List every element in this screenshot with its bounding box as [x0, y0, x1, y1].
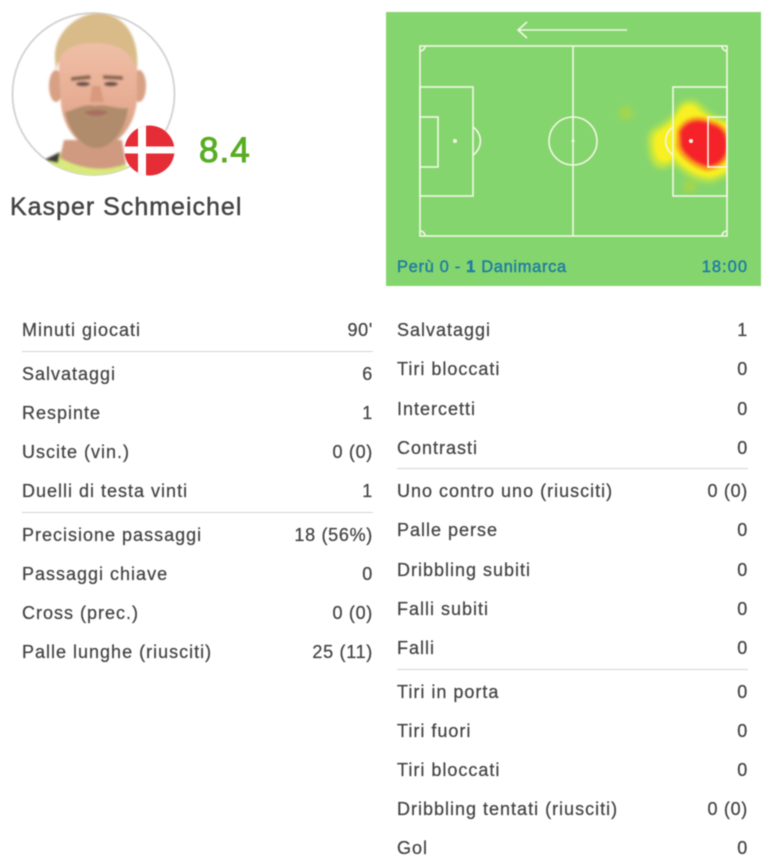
panel: defending and attacking stats: 0: [737, 682, 748, 702]
panel: defending and attacking stats: Intercetti: [397, 399, 476, 419]
flag of Denmark: [124, 124, 175, 176]
panel: goalkeeping and passing stats: Salvataggi: [22, 364, 116, 384]
rating: 8.4: [199, 131, 251, 170]
panel: goalkeeping and passing stats: 1: [362, 481, 373, 501]
panel: goalkeeping and passing stats: 90': [347, 320, 373, 340]
panel: defending and attacking stats: 1: [737, 320, 748, 340]
panel: defending and attacking stats: Falli: [397, 638, 435, 658]
panel: defending and attacking stats: Falli subiti: [397, 599, 489, 619]
panel: defending and attacking stats: Dribbling subiti: [397, 560, 531, 580]
player name: Kasper Schmeichel: [10, 193, 242, 221]
panel: defending and attacking stats: 0: [737, 520, 748, 540]
panel: defending and attacking stats: 0 (0): [707, 481, 748, 501]
panel: defending and attacking stats: 0: [737, 721, 748, 741]
panel: goalkeeping and passing stats: 1: [362, 403, 373, 423]
panel: goalkeeping and passing stats: 0 (0): [332, 442, 373, 462]
panel: goalkeeping and passing stats: 25 (11): [312, 642, 373, 662]
panel: defending and attacking stats: 0: [737, 760, 748, 780]
panel: defending and attacking stats: 0: [737, 638, 748, 658]
panel: defending and attacking stats: 0 (0): [707, 799, 748, 819]
panel: defending and attacking stats: Tiri fuori: [397, 721, 471, 741]
panel: goalkeeping and passing stats: 0 (0): [332, 603, 373, 623]
panel: defending and attacking stats: Tiri in porta: [397, 682, 499, 702]
player photo: [11, 12, 176, 176]
panel: defending and attacking stats: 0: [737, 359, 748, 379]
panel: goalkeeping and passing stats: Palle lunghe (riusciti): [22, 642, 212, 662]
panel: goalkeeping and passing stats: Respinte: [22, 403, 101, 423]
panel: defending and attacking stats: Gol: [397, 838, 428, 858]
panel: defending and attacking stats: 0: [737, 599, 748, 619]
panel: goalkeeping and passing stats: Minuti giocati: [22, 320, 141, 340]
panel: goalkeeping and passing stats: [22, 320, 373, 663]
match score: Perù 0 - 1 Danimarca: [397, 258, 567, 276]
panel: defending and attacking stats: Salvataggi: [397, 320, 491, 340]
panel: defending and attacking stats: [396, 320, 748, 858]
panel: goalkeeping and passing stats: Uscite (vin.): [22, 442, 130, 462]
panel: goalkeeping and passing stats: Cross (prec.): [22, 603, 139, 623]
arrow: attack direction: [518, 22, 627, 38]
panel: defending and attacking stats: Tiri bloccati: [397, 359, 500, 379]
panel: goalkeeping and passing stats: 6: [362, 364, 373, 384]
panel: defending and attacking stats: Uno contro uno (riusciti): [397, 481, 613, 501]
match time: 18:00: [702, 258, 748, 276]
panel: defending and attacking stats: 0: [737, 560, 748, 580]
heatmap panel: [386, 12, 761, 286]
panel: defending and attacking stats: Contrasti: [397, 438, 478, 458]
panel: goalkeeping and passing stats: Duelli di testa vinti: [22, 481, 188, 501]
panel: defending and attacking stats: 0: [737, 838, 748, 858]
panel: defending and attacking stats: Palle perse: [397, 520, 498, 540]
panel: defending and attacking stats: 0: [737, 399, 748, 419]
panel: defending and attacking stats: Tiri bloccati: [397, 760, 500, 780]
panel: goalkeeping and passing stats: Passaggi chiave: [22, 564, 168, 584]
panel: goalkeeping and passing stats: Precisione passaggi: [22, 525, 202, 545]
panel: goalkeeping and passing stats: 0: [362, 564, 373, 584]
panel: goalkeeping and passing stats: 18 (56%): [294, 525, 373, 545]
panel: defending and attacking stats: 0: [737, 438, 748, 458]
pitch with heatmap: [418, 21, 729, 238]
panel: defending and attacking stats: Dribbling tentati (riusciti): [397, 799, 618, 819]
